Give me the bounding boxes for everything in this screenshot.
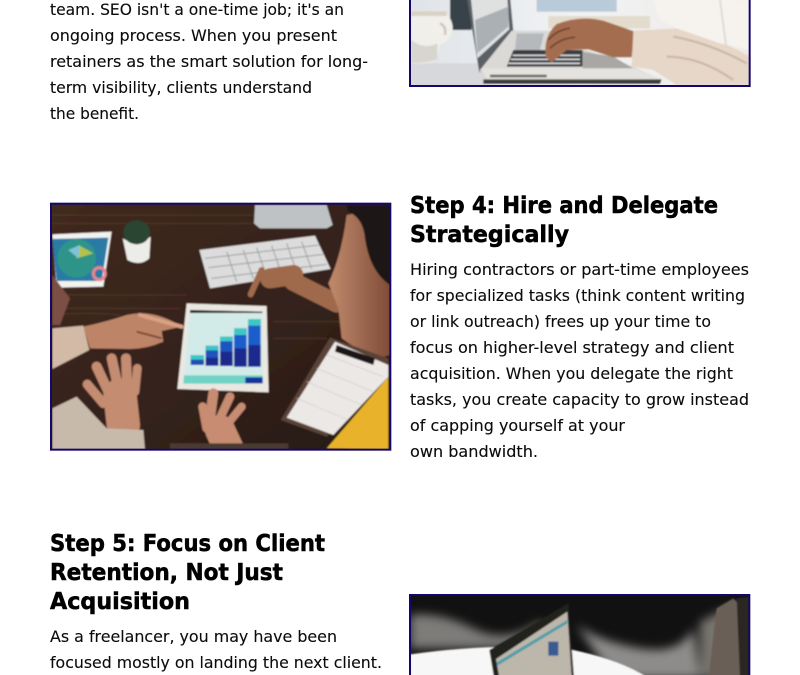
heading: step 4 (410, 191, 718, 248)
text block: step 4 paragraph: for specialized tasks (think content writing (410, 286, 745, 305)
text block: step 3 closing paragraph: team. SEO isn't a one-time job; it's an (50, 0, 344, 19)
text block: step 4 paragraph: or link outreach) frees up your time to (410, 312, 711, 331)
photo: laptop on a white table in mist (409, 594, 750, 675)
heading: step 4: Step 4: Hire and Delegate (410, 191, 718, 219)
photo: hands typing on a laptop (410, 0, 750, 87)
upper left hand on the desk (83, 313, 182, 349)
text block: step 4 paragraph: focus on higher-level strategy and client (410, 338, 734, 357)
text block: step 3 closing paragraph: term visibility, clients understand (50, 78, 312, 97)
text block: step 3 closing paragraph: ongoing process. When you present (50, 26, 337, 45)
text block: step 4 paragraph (410, 260, 749, 461)
text block: step 3 closing paragraph: the benefit. (50, 104, 139, 123)
text block: step 3 closing paragraph (50, 0, 368, 123)
text block: step 3 closing paragraph: retainers as the smart solution for long- (50, 52, 368, 71)
text block: step 5 paragraph (50, 627, 382, 672)
lower left hand on the desk (87, 358, 137, 425)
heading: step 4: Strategically (410, 220, 569, 248)
text block: step 4 paragraph: of capping yourself at your (410, 416, 625, 435)
heading: step 5: Acquisition (50, 587, 190, 615)
center bottom hand (203, 393, 242, 452)
text block: step 4 paragraph: acquisition. When you delegate the right (410, 364, 733, 383)
heading: step 5: Step 5: Focus on Client (50, 529, 325, 557)
text block: step 4 paragraph: Hiring contractors or part-time employees (410, 260, 749, 279)
text block: step 5 paragraph: As a freelancer, you may have been (50, 627, 337, 646)
photo: team reviewing a tablet chart on a desk (51, 203, 391, 452)
text block: step 4 paragraph: own bandwidth. (410, 442, 538, 461)
heading: step 5: Retention, Not Just (50, 558, 283, 586)
heading: step 5 (50, 529, 325, 615)
text block: step 5 paragraph: focused mostly on landing the next client. (50, 653, 382, 672)
pointing hand (251, 270, 337, 303)
text block: step 4 paragraph: tasks, you create capacity to grow instead (410, 390, 749, 409)
